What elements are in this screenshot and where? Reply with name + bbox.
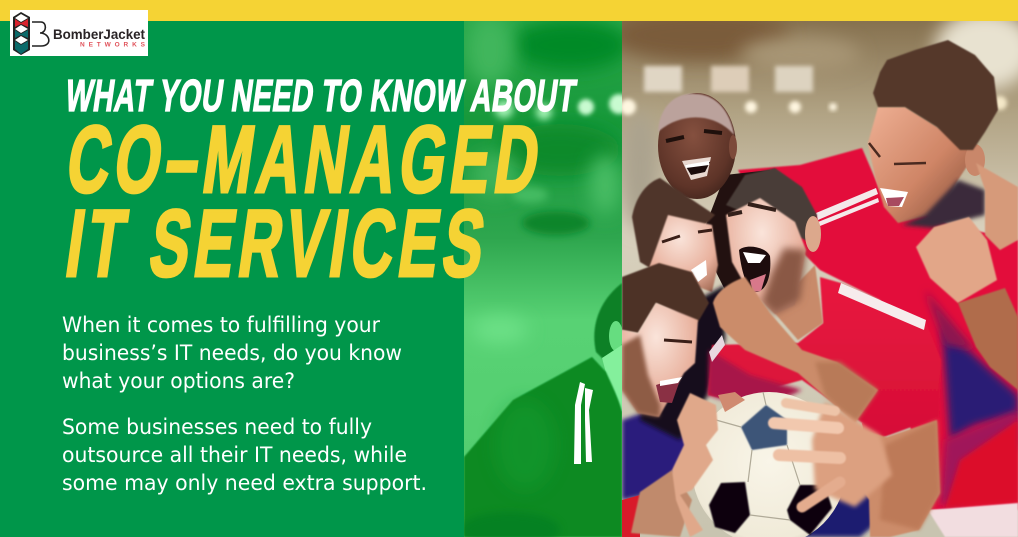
bald player [658,93,770,300]
bottom player head [622,263,709,417]
second paragraph: some may only need extra support. [62,471,427,495]
intro paragraph: what your options are? [62,369,295,393]
heading line: what you need to know: WHAT YOU NEED TO KNOW ABOUT [63,72,579,122]
intro paragraph: business’s IT needs, do you know [62,341,402,365]
football [692,392,846,537]
photo of celebrating football players [610,9,1018,537]
intro paragraph [62,313,402,393]
top yellow bar [0,0,1018,21]
heading line: co-managed: CO–MANAGED [61,106,546,212]
second paragraph: Some businesses need to fully [62,415,372,439]
right player head [868,40,1018,250]
logo subtitle: NETWORKS [80,42,146,48]
green tinted photo strip [460,14,630,537]
icon: player in green jersey [460,283,623,537]
intro paragraph: When it comes to fulfilling your [62,313,380,337]
bottom player body [622,285,725,537]
front player head [726,168,823,340]
second paragraph [62,415,427,495]
heading line: IT services: IT SERVICES [60,190,491,296]
second paragraph: outsource all their IT needs, while [62,443,407,467]
logo wordmark: BomberJacket [53,26,145,42]
hands on the ball [672,392,940,537]
title [60,72,579,296]
logo [10,10,148,56]
right player red shirt [738,148,1018,537]
icon: hexagon stack logo mark [13,12,49,55]
arm around neck [713,277,878,423]
right player raised fist [916,217,1018,390]
player with eyes shut [632,178,718,292]
front player red shirt [708,277,941,537]
